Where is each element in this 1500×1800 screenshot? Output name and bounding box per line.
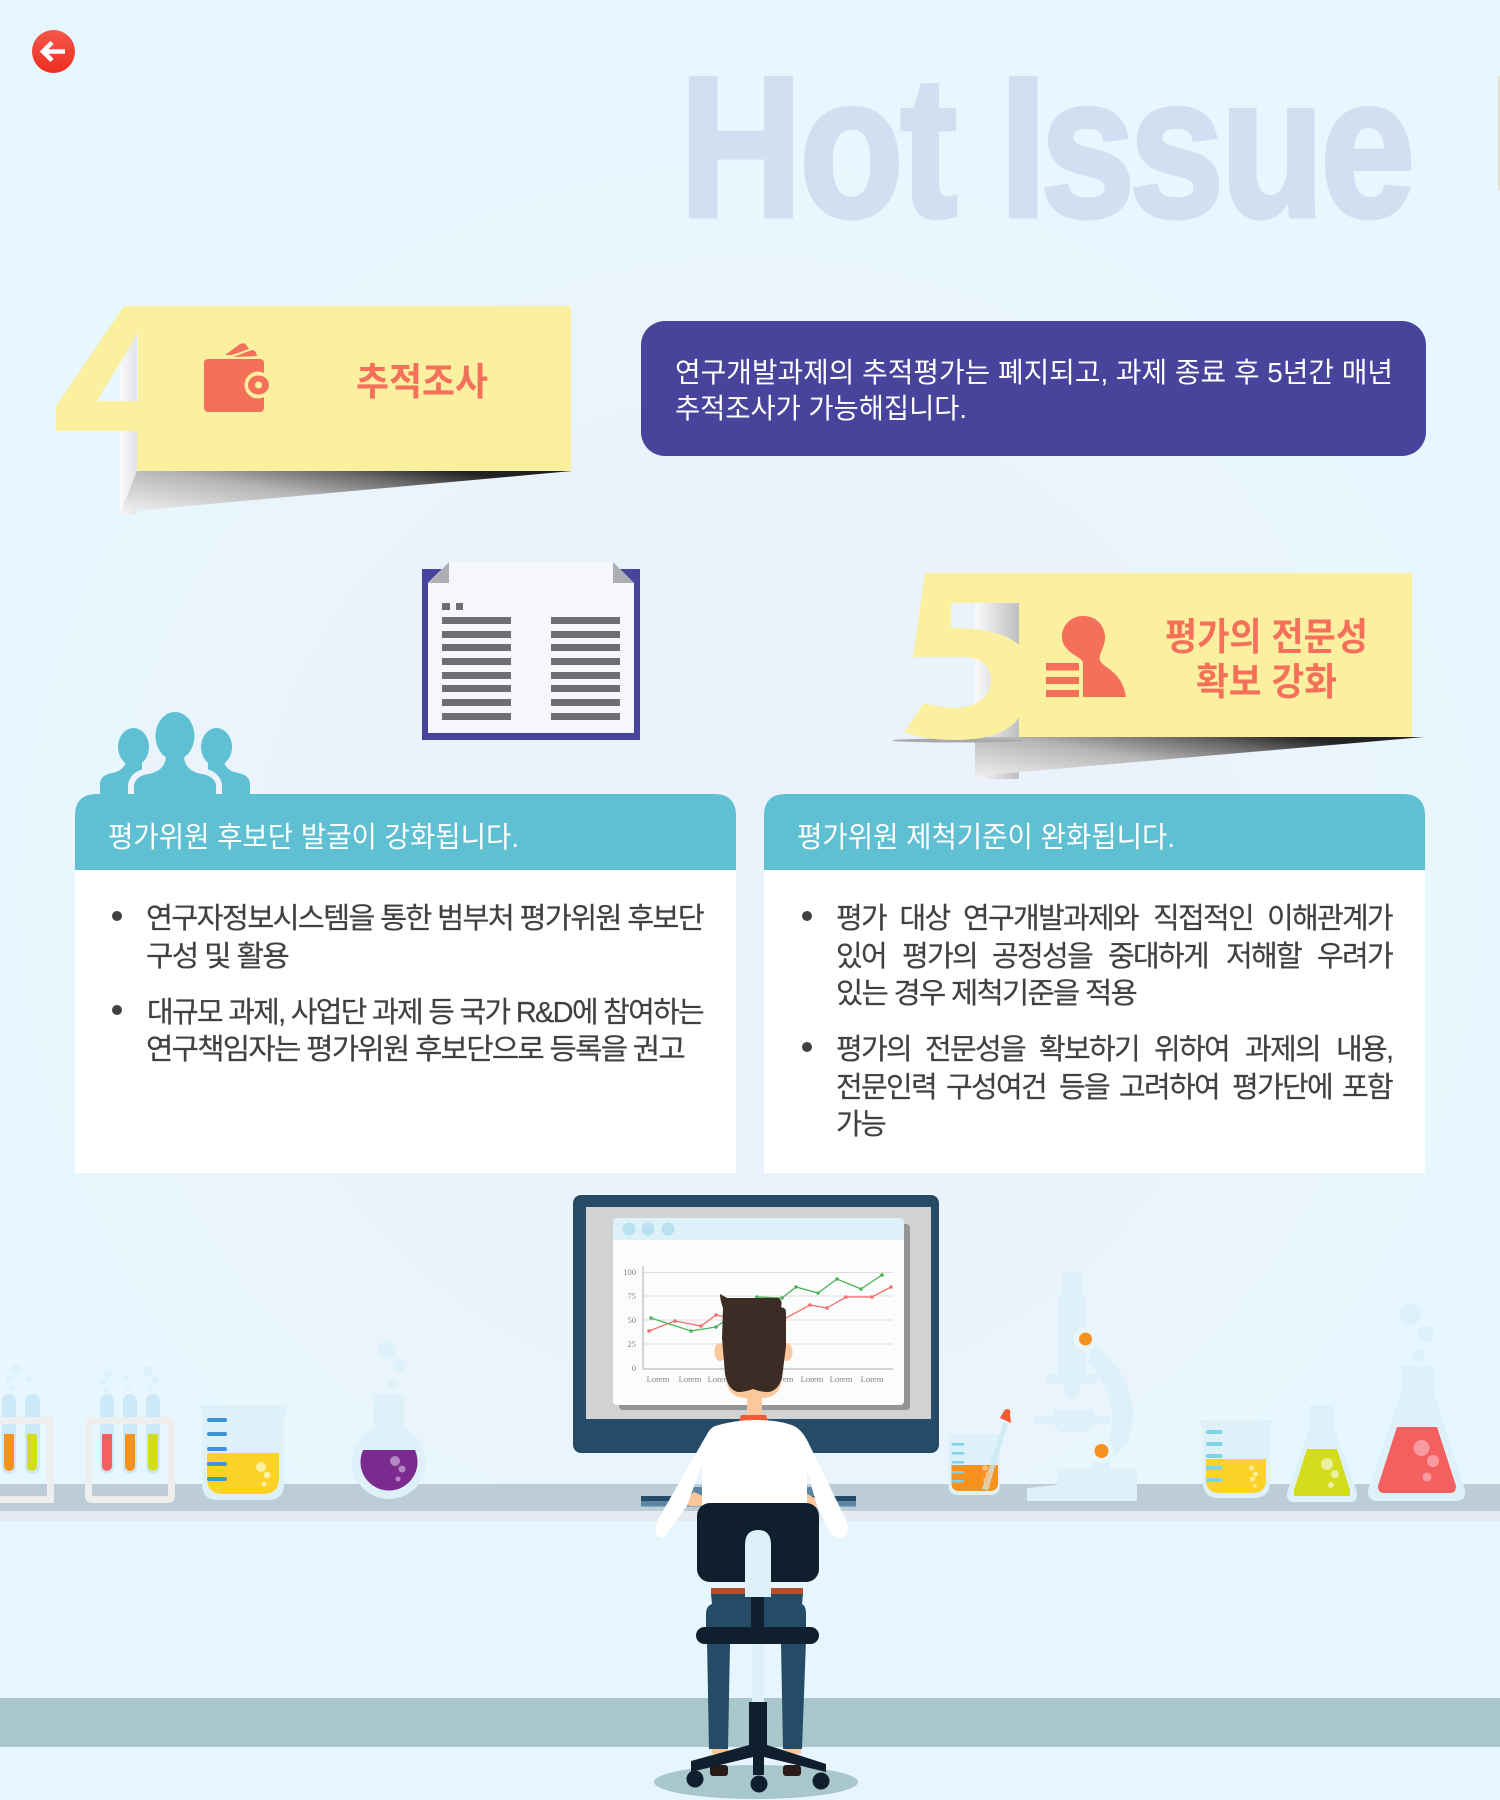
floor shadow [654,1765,858,1799]
icon: person with list [1046,616,1126,697]
line chart: Lorem [771,1374,794,1384]
panel body [764,860,1425,1173]
chart window [613,1218,904,1405]
panel header [75,794,736,870]
bullet list: 평가 [836,903,887,935]
panel: exclusion criteria [764,794,1425,1173]
heading: 추적조사 [356,362,488,404]
yellow banner with numeral 5 [904,573,1412,740]
section 5 banner [892,573,1424,779]
line chart: Lorem [708,1374,731,1384]
line chart: Lorem [647,1374,670,1384]
bullet list: 구성여건 [946,1072,1046,1104]
bullet list: 연구자정보시스템을 통한 범부처 평가위원 후보단 [146,902,704,935]
bullet list: 전문성을 [925,1034,1026,1066]
header text: 평가위원 후보단 발굴이 강화됩니다. [108,821,519,854]
section 5 banner: 확보 강화 [1196,662,1337,704]
right edge mark [1498,76,1500,190]
trousers [706,1594,806,1749]
panel body [75,860,736,1173]
flask green [1287,1405,1357,1502]
line chart: Lorem [801,1374,824,1384]
panel header [764,794,1425,870]
bullet list: 연구개발과제와 [963,903,1139,935]
person at desk [656,1294,848,1776]
callout: purple summary: 연구개발과제의 추적평가는 폐지되고, 과제 종료 후 5년간 매년 [675,357,1393,388]
floor band [0,1698,1500,1747]
icon: document [422,562,640,740]
lab bench [0,1484,1500,1521]
bullet list [112,902,704,1066]
bullet list: 위하여 [1154,1033,1229,1066]
bullet list: 있어 [836,941,886,973]
bullet list: 연구책임자는 평가위원 후보단으로 등록을 권고 [146,1033,685,1066]
belt [711,1588,803,1594]
bullet list: 전문인력 [836,1072,936,1104]
base and wheels [691,1745,826,1775]
heading: 평가의 전문성 [1165,617,1368,659]
bullet list: 과제의 [1245,1034,1320,1066]
line chart: Lorem [679,1374,702,1384]
line chart: 75 [628,1291,636,1301]
bullet list: 있는 경우 제척기준을 적용 [836,977,1137,1010]
hair [720,1294,786,1392]
bullet list: 대규모 과제, 사업단 과제 등 국가 R&D에 참여하는 [147,996,704,1029]
bullet list: 대상 [900,902,950,935]
bullet list: 가능 [836,1109,886,1141]
fold shadow [120,471,572,514]
bullet list: 포함 [1342,1072,1393,1104]
bullet list: 중대하게 [1108,940,1208,973]
line chart: 0 [632,1363,636,1373]
seat [696,1627,819,1644]
line chart: Lorem [830,1374,853,1384]
icon: wallet [204,343,272,412]
monitor [573,1195,939,1453]
back button icon [32,30,75,73]
backrest [697,1503,819,1582]
bullet list: 평가의 [902,941,977,973]
ears and neck [714,1343,792,1418]
line chart: Lorem [861,1374,884,1384]
beaker yellow left [199,1405,288,1500]
flask red [1368,1303,1465,1501]
line chart: 50 [628,1315,636,1325]
column [752,1644,764,1702]
bullet list: 공정성을 [992,941,1093,973]
bullet list: 내용, [1336,1034,1392,1066]
bullet list: 저해할 [1226,940,1302,973]
line chart: 25 [628,1339,636,1349]
hands [683,1492,703,1506]
title: Hot Issue [679,36,1415,259]
panel: evaluator candidates [75,794,736,1173]
bullet list: 평가단에 [1232,1071,1332,1104]
bullet list: 확보하기 [1039,1033,1139,1066]
collar [739,1415,768,1421]
bullet list [802,902,1393,1141]
flask purple [352,1341,426,1499]
fold shadow [975,737,1424,779]
shirt [656,1420,848,1538]
section 4 banner [56,306,572,514]
fold strip [120,336,137,514]
line chart: 100 [623,1267,636,1277]
header text: 평가위원 제척기준이 완화됩니다. [797,821,1175,854]
bullet list: 이해관계가 [1267,903,1393,935]
callout: purple summary: 추적조사가 가능해집니다. [675,393,967,424]
test tube rack left [0,1365,50,1500]
test tube rack middle [88,1366,172,1500]
bullet list: 고려하여 [1119,1071,1219,1104]
office chair [686,1503,830,1792]
callout: purple summary [641,321,1426,456]
microscope [1027,1271,1137,1501]
bullet list: 등을 [1059,1072,1110,1104]
fold strip [975,603,1019,779]
back post [745,1530,771,1597]
line chart [623,1266,893,1384]
yellow banner with numeral 4 [56,306,571,471]
bullet list: 구성 및 활용 [146,940,289,973]
bullet list: 평가의 [836,1034,911,1066]
icon: people [100,712,250,794]
ankles and shoes [710,1749,801,1776]
keyboard [641,1487,856,1506]
beaker orange with dropper [948,1409,1011,1495]
bullet list: 우려가 [1317,941,1393,973]
beaker yellow right [1200,1420,1272,1498]
bullet list: 직접적인 [1153,903,1253,935]
